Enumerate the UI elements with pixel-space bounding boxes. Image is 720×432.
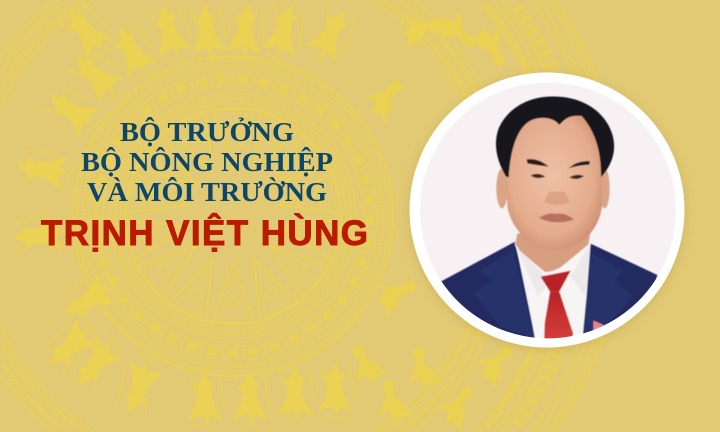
title line 3: VÀ MÔI TRƯỜNG xyxy=(87,177,327,207)
face xyxy=(506,115,602,250)
hair xyxy=(496,97,614,177)
shirt xyxy=(514,242,591,340)
portrait white ring xyxy=(410,72,684,348)
tie xyxy=(541,271,571,292)
lapel pin xyxy=(593,321,604,331)
title line 1: BỘ TRƯỞNG xyxy=(120,117,294,147)
photo backdrop xyxy=(420,82,676,338)
suit xyxy=(441,242,535,347)
title block xyxy=(81,117,333,207)
ears xyxy=(496,168,508,208)
neck xyxy=(515,233,590,273)
eyes xyxy=(531,174,545,178)
eyebrows xyxy=(527,159,549,167)
minister name: TRỊNH VIỆT HÙNG xyxy=(41,213,368,253)
lapels xyxy=(473,250,534,338)
nose xyxy=(544,192,570,205)
title line 2: BỘ NÔNG NGHIỆP xyxy=(81,147,333,177)
mouth xyxy=(539,213,574,222)
portrait photo xyxy=(420,82,676,347)
portrait frame shadow xyxy=(409,74,685,350)
